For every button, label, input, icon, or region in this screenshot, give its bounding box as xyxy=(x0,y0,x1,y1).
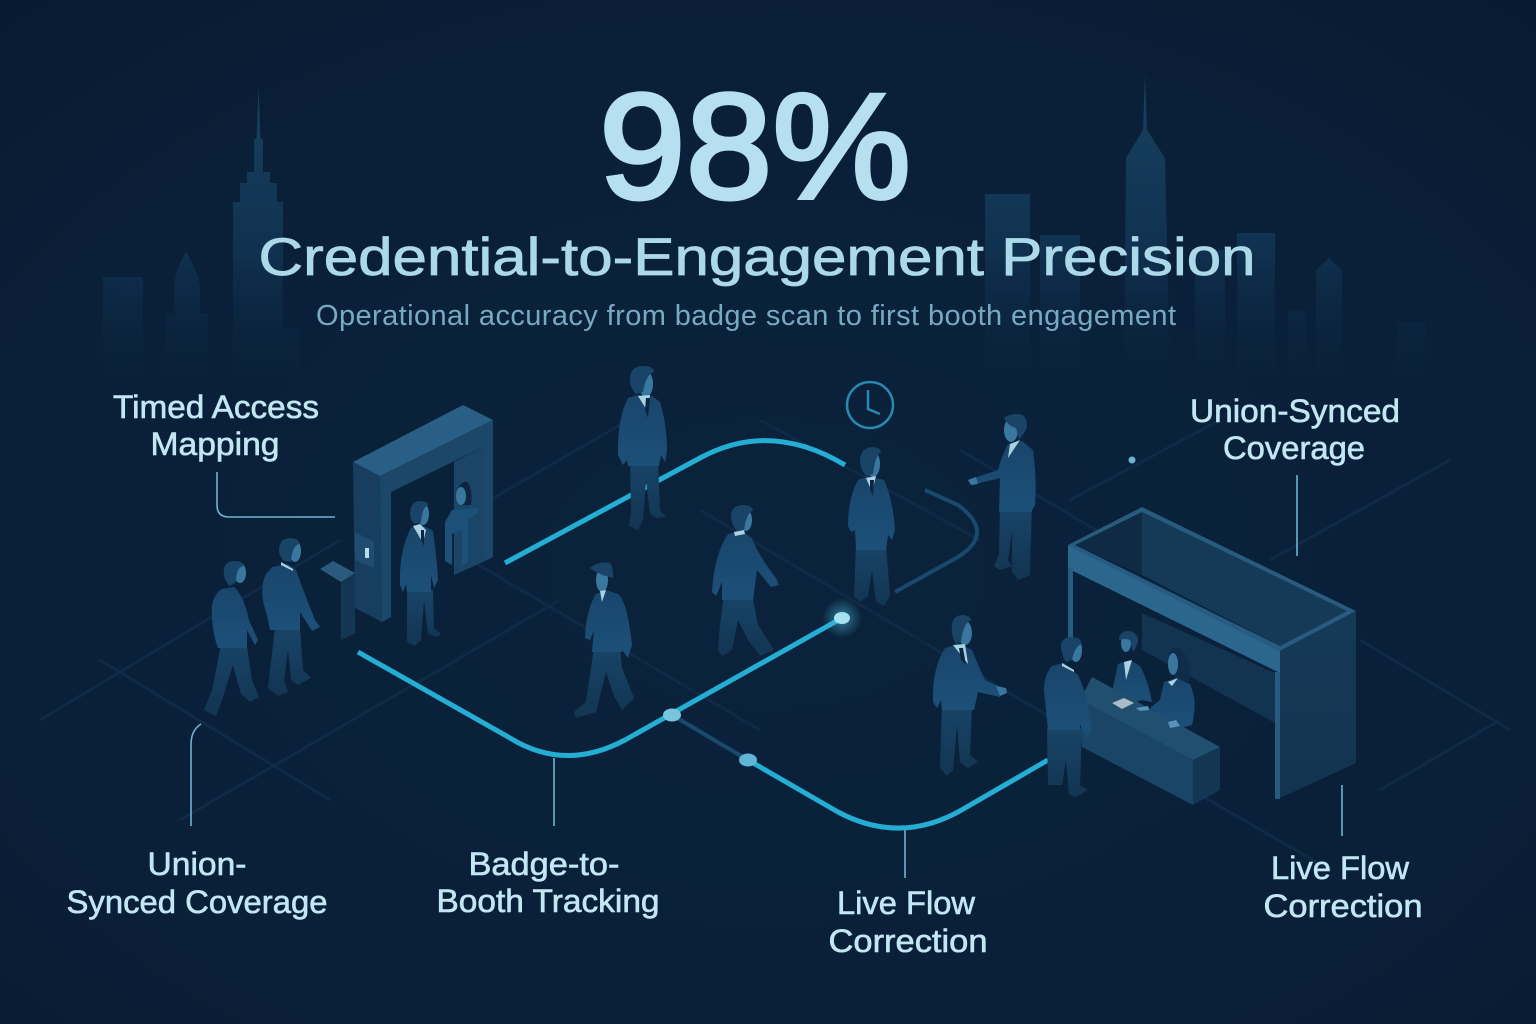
callout: Live Flow Correction right xyxy=(1264,785,1422,924)
callout: Live Flow Correction right: Live Flow xyxy=(1271,850,1410,886)
person: walker back xyxy=(204,561,259,716)
callout: Union-Synced Coverage bottom left: Synced Coverage xyxy=(66,884,328,920)
booth counter xyxy=(1080,677,1220,805)
gate inner panel xyxy=(454,447,483,575)
person: walking centre xyxy=(712,505,779,656)
staff hands xyxy=(1136,706,1180,728)
main title: 98%: 98% xyxy=(599,62,911,230)
left city skyline xyxy=(103,87,300,375)
callout: Timed Access Mapping: Mapping xyxy=(150,426,280,462)
person: centre standing xyxy=(848,447,895,606)
subtitle: Operational accuracy from badge scan to first booth engagement xyxy=(316,300,1176,332)
booth right wall xyxy=(1280,611,1356,798)
person: at gate xyxy=(400,501,441,646)
flow path: dim loop xyxy=(895,490,977,592)
person: walking down xyxy=(574,563,634,718)
paper xyxy=(1112,698,1134,709)
booth interior left wall xyxy=(1075,512,1142,575)
floor grid xyxy=(40,420,1510,870)
exhibition booth xyxy=(1068,507,1356,799)
booth staff: woman xyxy=(1150,648,1195,728)
callout: Live Flow Correction centre: Correction xyxy=(828,923,988,959)
kiosk xyxy=(320,561,355,640)
callout: Badge-to-Booth Tracking: Booth Tracking xyxy=(436,883,660,919)
callout: Live Flow Correction centre: Live Flow xyxy=(837,885,976,921)
person: customer xyxy=(1044,637,1092,797)
booth staff: man xyxy=(1112,631,1152,706)
callout: Badge-to-Booth Tracking: Badge-to- xyxy=(468,846,620,882)
callout: Live Flow Correction right: Correction xyxy=(1264,888,1422,924)
right city skyline xyxy=(985,75,1425,375)
gate front face xyxy=(380,420,493,622)
callout: Timed Access Mapping xyxy=(113,389,335,517)
booth frame xyxy=(1068,507,1356,651)
person: lower gesturing xyxy=(933,615,1007,776)
callout: Timed Access Mapping: Timed Access xyxy=(113,389,319,425)
flow path: main xyxy=(358,618,842,756)
flow nodes xyxy=(663,456,1136,766)
callout: Union-Synced Coverage bottom left xyxy=(66,724,328,920)
callout: Union-Synced Coverage top right: Coverage xyxy=(1223,430,1365,466)
callout: Badge-to-Booth Tracking xyxy=(436,758,660,919)
person: right greeting xyxy=(968,414,1036,580)
gate left face xyxy=(353,462,382,622)
booth back wall xyxy=(1142,512,1347,646)
gate top face xyxy=(353,405,493,476)
booth posts xyxy=(1068,568,1280,799)
booth fascia xyxy=(1068,545,1280,673)
card reader xyxy=(355,532,374,568)
flow path: branch xyxy=(672,715,1048,828)
callout: Union-Synced Coverage bottom left: Union- xyxy=(148,846,246,882)
callout: Union-Synced Coverage top right: Union-Synced xyxy=(1190,393,1400,429)
booth lower rear wall xyxy=(1142,613,1275,723)
person: walker front xyxy=(262,538,320,696)
callout: Union-Synced Coverage top right xyxy=(1190,393,1400,556)
access gate xyxy=(320,405,493,640)
person: standing top xyxy=(618,366,667,530)
flow path: upper xyxy=(505,441,845,563)
heading: Credential-to-Engagement Precision xyxy=(258,228,1256,287)
callout: Live Flow Correction centre xyxy=(828,830,988,959)
icon: clock xyxy=(847,382,893,428)
seated gate agent xyxy=(445,482,478,566)
